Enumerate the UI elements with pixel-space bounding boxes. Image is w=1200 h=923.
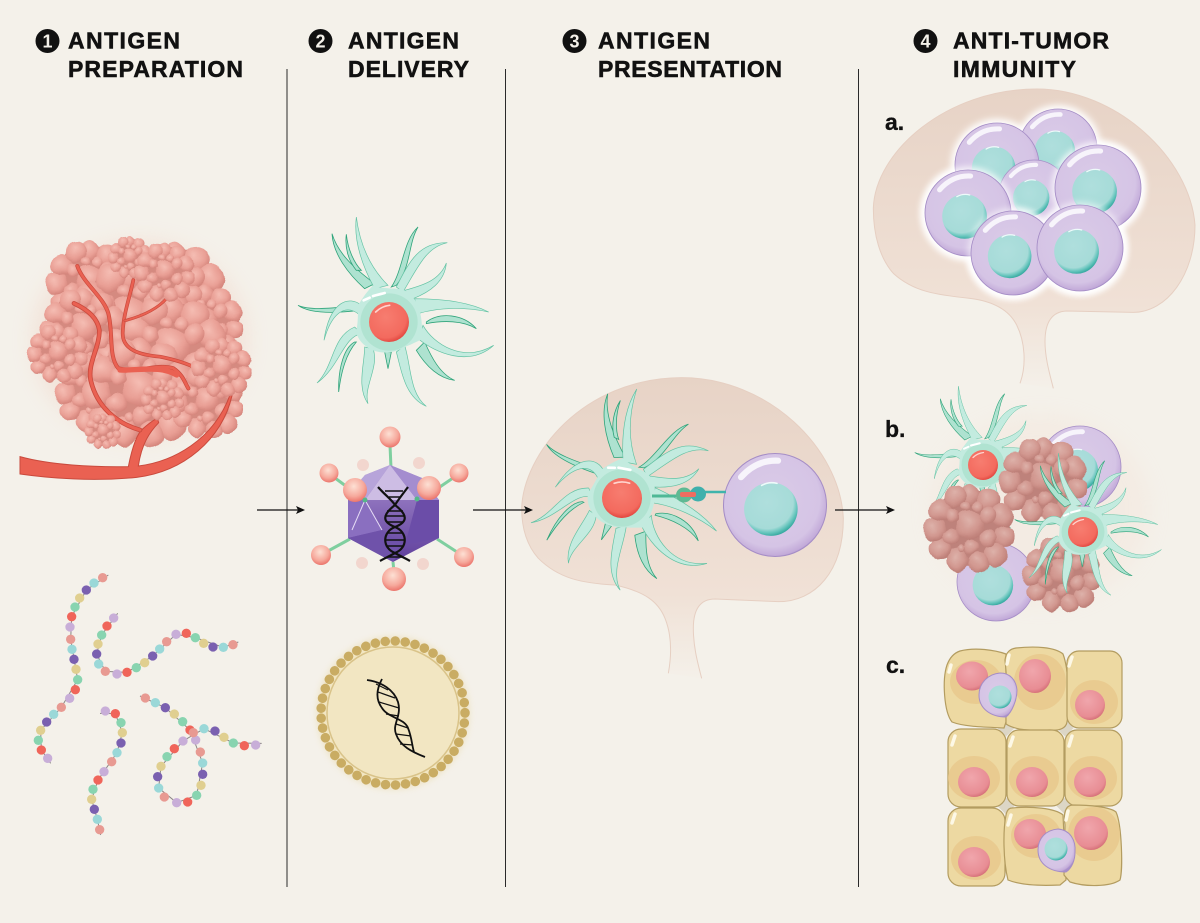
heading: 4 anti-tumor immunity: ANTI-TUMOR [953,28,1109,54]
tumor attacked by immune cells [915,386,1161,621]
label b: b. [885,416,905,442]
peptide chains [34,573,262,835]
RNA strand [367,679,425,757]
heading: 4 anti-tumor immunity [914,28,1109,82]
DNA strand inside vector [378,487,410,561]
panel: lymph node with antigen presentation [504,364,843,678]
panel: lymph node with T cell proliferation [873,89,1195,388]
heading: 1 antigen preparation: 1 [42,32,53,52]
arrow 3 to 4 [835,506,895,514]
dendritic cell: delivery [298,217,494,406]
healthy tissue with patrolling T cells [944,647,1122,886]
arrow 1 to 2 [257,506,305,514]
dendritic cell [504,364,761,619]
label c: c. [886,652,905,678]
heading: 3 antigen presentation: 3 [569,32,580,52]
label a: a. [885,109,904,135]
heading: 1 antigen preparation [36,28,243,82]
column dividers [287,69,858,887]
tumor with blood vessels [20,236,252,479]
heading: 1 antigen preparation: ANTIGEN [68,28,180,54]
heading: 3 antigen presentation: PRESENTATION [598,56,782,82]
lipid nanoparticle with nucleic acid [317,637,469,789]
infiltrating T cell [1038,829,1075,872]
heading: 2 antigen delivery [308,28,469,82]
heading: 2 antigen delivery: 2 [315,32,326,52]
heading: 4 anti-tumor immunity: IMMUNITY [953,56,1076,82]
heading: 2 antigen delivery: ANTIGEN [348,28,459,54]
infiltrating T cell [979,673,1017,717]
immune synapse [652,486,726,502]
heading: 3 antigen presentation [562,28,782,82]
viral vector [311,426,474,591]
heading: 1 antigen preparation: PREPARATION [68,56,243,82]
heading: 3 antigen presentation: ANTIGEN [598,28,710,54]
blood vessels [20,266,232,479]
T cell [724,454,826,556]
arrow 2 to 3 [473,506,533,514]
heading: 2 antigen delivery: DELIVERY [348,56,469,82]
heading: 4 anti-tumor immunity: 4 [920,32,931,52]
